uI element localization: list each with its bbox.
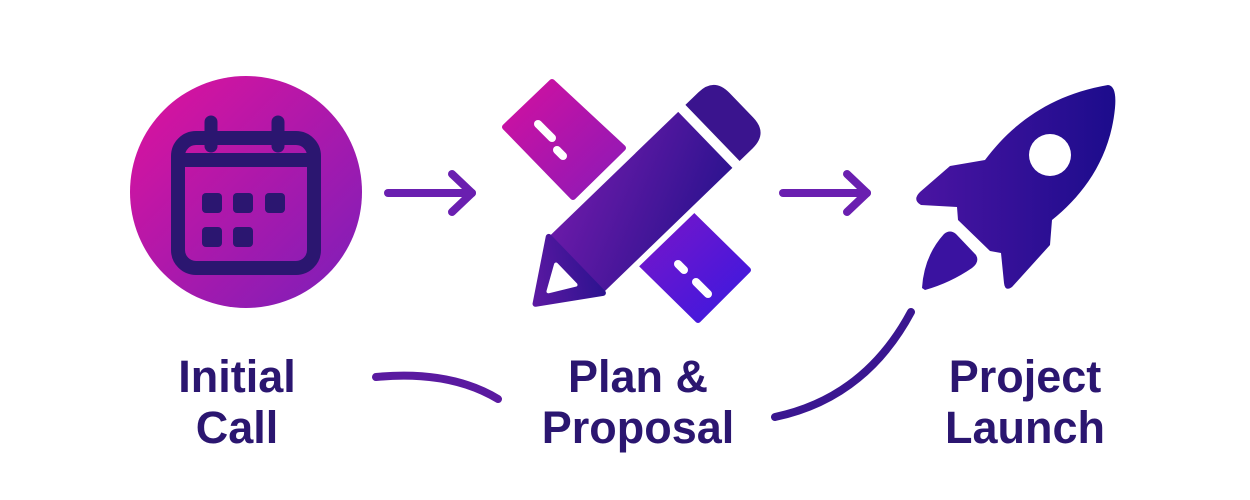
icon: pencil and ruler <box>504 73 773 336</box>
label: Plan & Proposal: Plan & <box>568 351 708 402</box>
label: Initial Call: Initial <box>178 351 296 402</box>
label: Plan & Proposal: Proposal <box>542 402 734 453</box>
icon: rocket <box>916 85 1115 290</box>
arrow 2 <box>783 174 867 212</box>
arrow 1 <box>388 174 472 212</box>
label: Initial Call: Call <box>196 402 278 453</box>
label: Project Launch: Launch <box>945 402 1105 453</box>
connector curve 1 <box>376 376 498 399</box>
icon: calendar circle <box>130 76 362 308</box>
connector curve 2 <box>775 312 911 417</box>
label: Project Launch: Project <box>949 351 1101 402</box>
